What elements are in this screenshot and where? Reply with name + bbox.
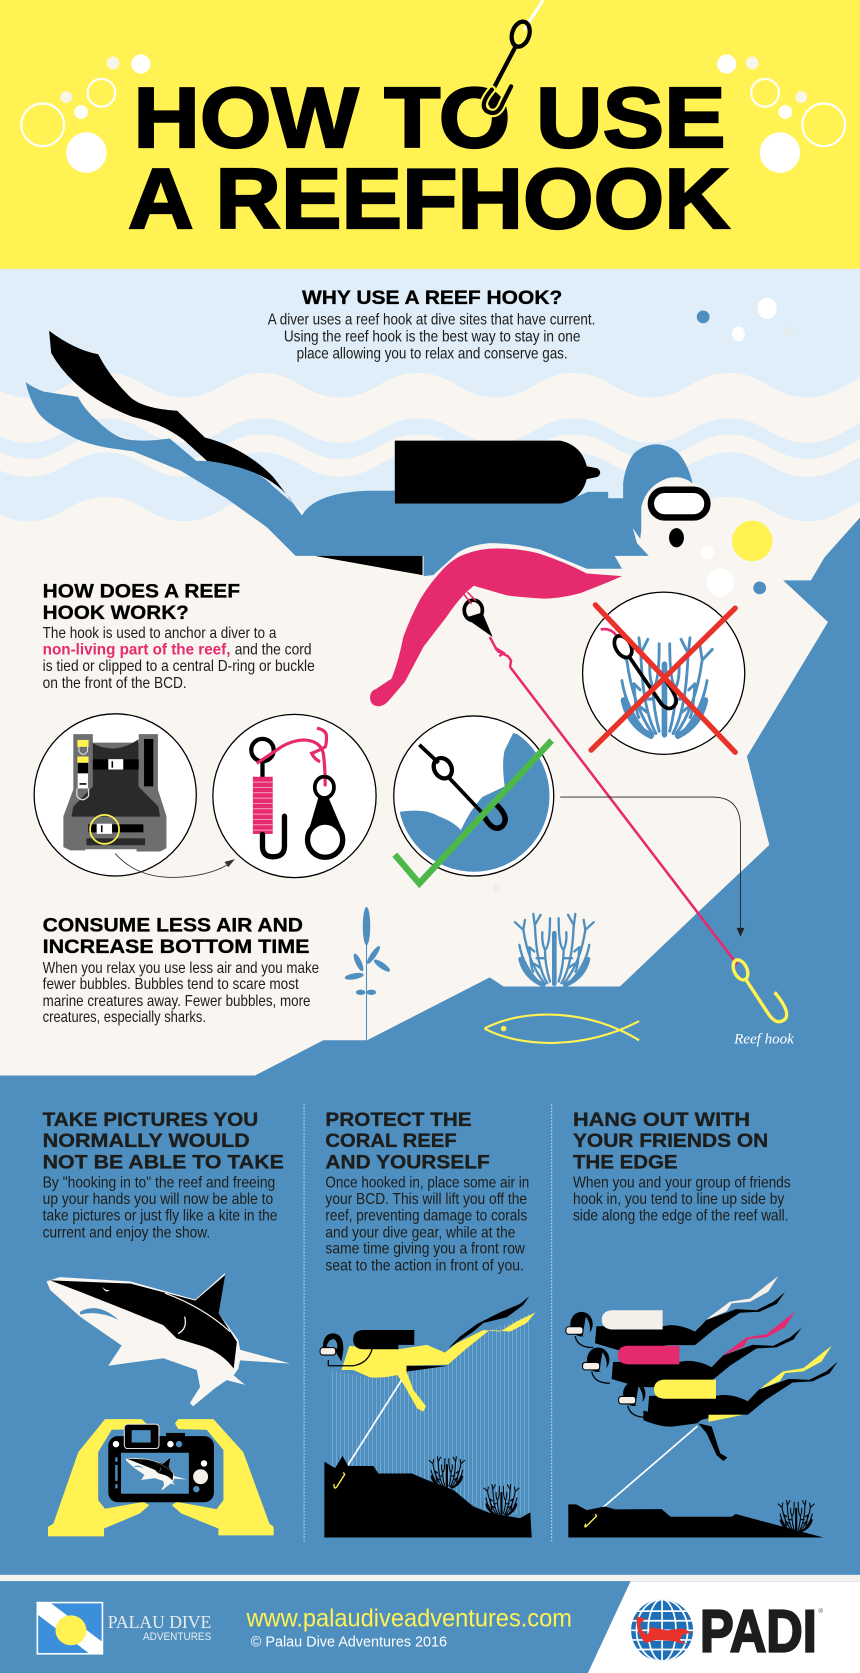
body text: By "hooking in to" the reef and freeing [43,1175,275,1192]
icon: yellow fish [484,1015,639,1043]
tank [395,441,600,504]
icon: hands and camera [48,1419,274,1536]
circle: correct placement [384,716,566,886]
heading: TAKE PICTURES YOU [43,1110,258,1131]
heading: NOT BE ABLE TO TAKE [43,1152,284,1173]
text block: why use a reef hook: place allowing you to relax and conserve gas. [297,346,568,362]
body text [573,1175,791,1225]
body text: take pictures or just fly like a kite in the [43,1208,277,1225]
label: reef hook: Reef hook [733,1031,794,1047]
heading: THE EDGE [573,1152,678,1173]
reef hook clip at diver's waist [463,592,511,667]
circle: wrong placement [583,592,745,754]
icon: coral [515,914,594,985]
circle: BCD [34,714,196,876]
body text: hook in, you tend to line up side by [573,1191,784,1208]
reef silhouette [568,1504,823,1537]
body text: side along the edge of the reef wall. [573,1208,789,1225]
current lines [332,1313,530,1515]
hook cord [343,1380,402,1472]
text block: consume less air: marine creatures away. Fewer bubbles, more [43,993,310,1010]
body text: reef, preventing damage to corals [325,1208,527,1225]
pink arm [370,548,622,706]
text block: consume less air: fewer bubbles. Bubbles tend to scare most [43,976,299,993]
logo: PADI: PADI [700,1598,817,1665]
text block: how does a reef hook work: HOOK WORK? [43,602,189,624]
coral [778,1500,814,1531]
reef wall [255,517,860,1076]
panel: header [0,0,860,269]
regulator [669,528,684,547]
website url: www.palaudiveadventures.com [246,1606,572,1633]
arrow: to reef hook [560,797,744,936]
text block: consume less air: INCREASE BOTTOM TIME [43,936,309,958]
body text: up your hands you will now be able to [43,1191,273,1208]
left bubbles [21,54,150,173]
bubbles near top right [697,298,793,341]
text block: how does a reef hook work: on the front of the BCD. [43,675,187,692]
body text: Once hooked in, place some air in [325,1175,529,1192]
icon: seaweed [344,907,392,1040]
text block: consume less air: When you relax you use less air and you make [43,960,319,977]
text block: how does a reef hook work [43,581,315,692]
corals [429,1457,519,1515]
text block: how does a reef hook work: and the cord [235,642,312,659]
title [128,71,730,247]
cord from diver to hook [510,667,737,965]
diver 2 [583,1312,802,1387]
panel: take pictures [43,1110,290,1536]
circle: hook and clip [213,714,376,878]
text block: how does a reef hook work: HOW DOES A REEF [43,581,240,602]
title: A REEFHOOK [128,152,730,247]
body text: and your dive gear, while at the [325,1225,515,1242]
hook cord [596,1426,697,1513]
pale speck [492,884,500,891]
heading [573,1110,768,1173]
text block: why use a reef hook: A diver uses a reef hook at dive sites that have current. [268,311,595,328]
coral [617,638,712,736]
logo: Palau Dive Adventures: ADVENTURES [143,1631,211,1643]
panel: protect the coral reef [320,1110,536,1537]
diver 3 [619,1346,838,1461]
body text: current and enjoy the show. [43,1225,210,1242]
text block: how does a reef hook work: is tied or clipped to a central D-ring or buckle [43,658,315,675]
body text [325,1175,529,1275]
text block: consume less air: CONSUME LESS AIR AND [43,914,303,936]
blue fin and body [26,382,692,576]
illustration: main diver [26,331,773,706]
black fin [49,331,293,504]
text block: how does a reef hook work: non-living part of the reef, [43,642,230,659]
small hook [585,1514,596,1527]
title: HOW TO USE [133,71,726,166]
body text: seat to the action in front of you. [325,1258,524,1275]
heading [325,1110,490,1173]
diver 1 [566,1276,785,1352]
heading: AND YOURSELF [325,1152,490,1173]
body text: same time giving you a front row [325,1241,526,1258]
dotted dividers [304,1104,552,1543]
heading [43,1110,284,1173]
small hook [334,1472,345,1488]
body text: your BCD. This will lift you off the [325,1191,527,1208]
heading: PROTECT THE [325,1110,472,1131]
face [633,478,713,560]
logo: Palau Dive Adventures [37,1603,211,1654]
text block: how does a reef hook work: The hook is used to anchor a diver to a [43,625,277,642]
body text [43,1175,277,1242]
reef silhouette [324,1456,532,1537]
red cross [591,605,735,752]
hook [601,629,676,708]
text block: why use a reef hook: WHY USE A REEF HOOK? [302,287,562,309]
bubbles by face [701,521,773,596]
text block: why use a reef hook [268,287,595,362]
panel: footer [0,1575,860,1673]
heading: HANG OUT WITH [573,1110,750,1131]
heading: NORMALLY WOULD [43,1131,250,1152]
icon: shark [47,1273,290,1406]
copyright: © Palau Dive Adventures 2016 [251,1633,447,1650]
icon: header hook [484,0,543,113]
heading: YOUR FRIENDS ON [573,1131,768,1152]
logo: Palau Dive Adventures: PALAU DIVE [108,1612,211,1632]
icon: yellow reef hook [730,957,787,1022]
panel: hang out with friends [566,1110,838,1537]
yellow diver [320,1296,536,1412]
text block: why use a reef hook: Using the reef hook is the best way to stay in one [284,328,580,345]
heading: CORAL REEF [325,1131,457,1152]
mask [651,490,707,517]
body text: When you and your group of friends [573,1175,791,1192]
logo: PADI: ® [818,1607,823,1615]
text block: consume less air: creatures, especially sharks. [43,1009,206,1026]
right bubbles [717,54,845,173]
black belly strip [315,556,423,575]
logo: PADI [630,1598,823,1665]
text block: consume less air [43,914,319,1026]
arrow: BCD to hook [115,854,234,877]
